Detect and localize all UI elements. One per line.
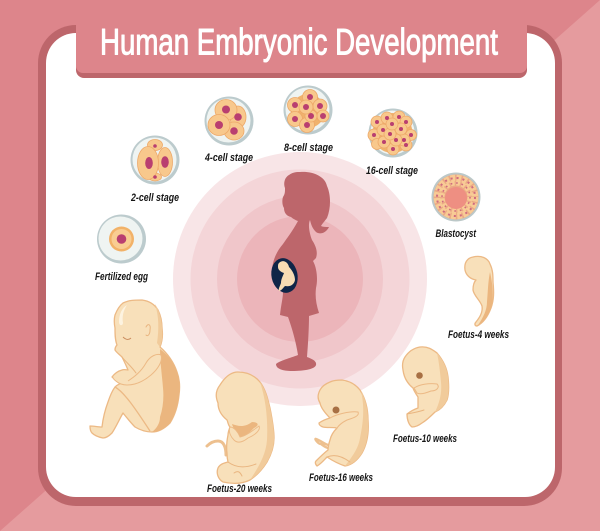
stage: 2-cell	[130, 136, 180, 204]
pregnant woman silhouette	[268, 172, 330, 371]
stage: foetus 4 weeks	[448, 256, 509, 341]
label: Fertilized egg	[95, 271, 148, 283]
label: Foetus-4 weeks	[448, 329, 509, 341]
stage: foetus 20 weeks	[207, 372, 274, 495]
concentric rings	[173, 152, 427, 406]
stage: 16-cell	[366, 108, 418, 177]
label: Foetus-16 weeks	[309, 472, 373, 484]
label: Foetus-20 weeks	[207, 483, 272, 495]
stage: foetus 10 weeks	[393, 347, 457, 445]
label: 4-cell stage	[204, 152, 253, 164]
label: Blastocyst	[436, 228, 477, 240]
panel: main card	[38, 25, 562, 506]
label: Foetus-10 weeks	[393, 433, 457, 445]
stage: 4-cell	[204, 96, 254, 164]
title banner	[76, 22, 527, 78]
label: 8-cell stage	[284, 142, 333, 154]
stage: foetus 16 weeks	[309, 380, 373, 484]
stage: 8-cell	[284, 86, 333, 154]
stage: fertilized egg	[95, 214, 148, 283]
stage: blastocyst	[432, 172, 480, 240]
stage: full-term foetus	[90, 300, 180, 438]
label: 2-cell stage	[130, 192, 179, 204]
womb with foetus	[268, 256, 301, 295]
label: 16-cell stage	[366, 165, 418, 177]
